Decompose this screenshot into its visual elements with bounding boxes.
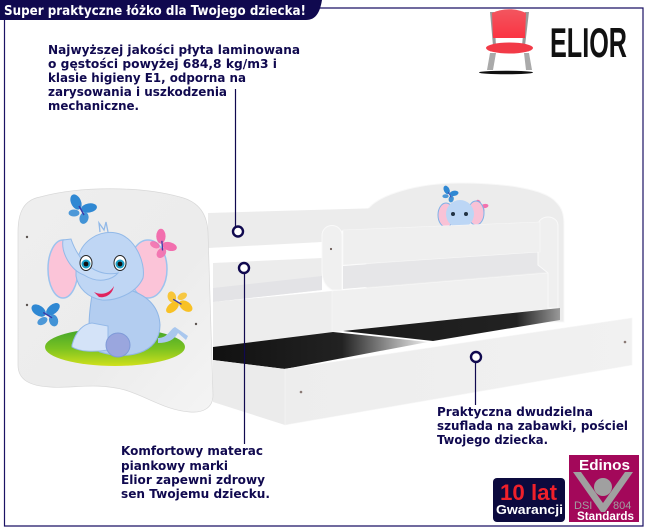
head [76, 232, 143, 300]
front side board [332, 273, 558, 332]
back rail [208, 208, 382, 248]
right front rail post [538, 217, 558, 308]
callout: laminated board: o gęstości powyżej 684,8 kg/m3 i [48, 56, 277, 71]
badge: Edinos standards: 804 [613, 500, 631, 512]
trunk [63, 239, 118, 280]
tail [158, 327, 188, 343]
bed illustration [18, 183, 632, 425]
mouth [94, 286, 114, 297]
callout: laminated board [48, 42, 300, 236]
callout: drawer: szuflada na zabawki, pościel [437, 418, 628, 433]
front rail [343, 222, 540, 265]
badge: Edinos standards: Standards [577, 511, 634, 523]
callout: laminated board: zarysowania i uszkodzenia [48, 84, 227, 99]
butterflies [27, 193, 197, 334]
tuft [99, 222, 108, 232]
callout: laminated board: Najwyższej jakości płyta laminowana [48, 42, 300, 57]
callout: mattress: Elior zapewni zdrowy [121, 472, 265, 487]
drawer cavity right [343, 308, 560, 341]
badge: Edinos standards: DSI [574, 500, 592, 512]
icon: red chair [479, 9, 533, 74]
badge: Edinos standards: Edinos [579, 457, 630, 474]
callout: drawer [437, 352, 628, 447]
callout: laminated board: mechaniczne. [48, 98, 139, 113]
body [89, 290, 160, 355]
left side board [213, 291, 332, 347]
callout: laminated board: klasie higieny E1, odporna na [48, 70, 246, 85]
front legs [72, 323, 108, 351]
foot [106, 333, 130, 357]
drawer front [285, 318, 632, 425]
eyes [80, 256, 126, 270]
front footboard panel [18, 189, 213, 412]
ears [48, 240, 78, 298]
callout: mattress: piankowy marki [121, 458, 228, 473]
callout: drawer: Twojego dziecka. [437, 432, 548, 447]
badge: 10 year warranty: Gwarancji [496, 502, 563, 517]
callout: mattress [121, 263, 270, 501]
callout: mattress: sen Twojemu dziecku. [121, 486, 270, 501]
mattress right section [343, 252, 546, 289]
badge: Edinos standards [569, 455, 639, 523]
header banner: Super praktyczne łóżko dla Twojego dziecka! [4, 4, 306, 19]
lower bed body [213, 360, 285, 425]
back headboard [366, 183, 564, 322]
callout: mattress: Komfortowy materac [121, 443, 263, 458]
grass [45, 328, 185, 366]
left mattress section [213, 258, 322, 302]
drawer cavity left [213, 332, 428, 369]
left front rail post [322, 226, 342, 290]
badge: 10 year warranty [493, 478, 565, 522]
logo: Elior [479, 9, 627, 74]
elephant artwork [45, 222, 188, 366]
callout: drawer: Praktyczna dwudzielna [437, 404, 593, 419]
small elephant on headboard [438, 185, 489, 228]
badge: 10 year warranty: 10 lat [500, 480, 558, 505]
